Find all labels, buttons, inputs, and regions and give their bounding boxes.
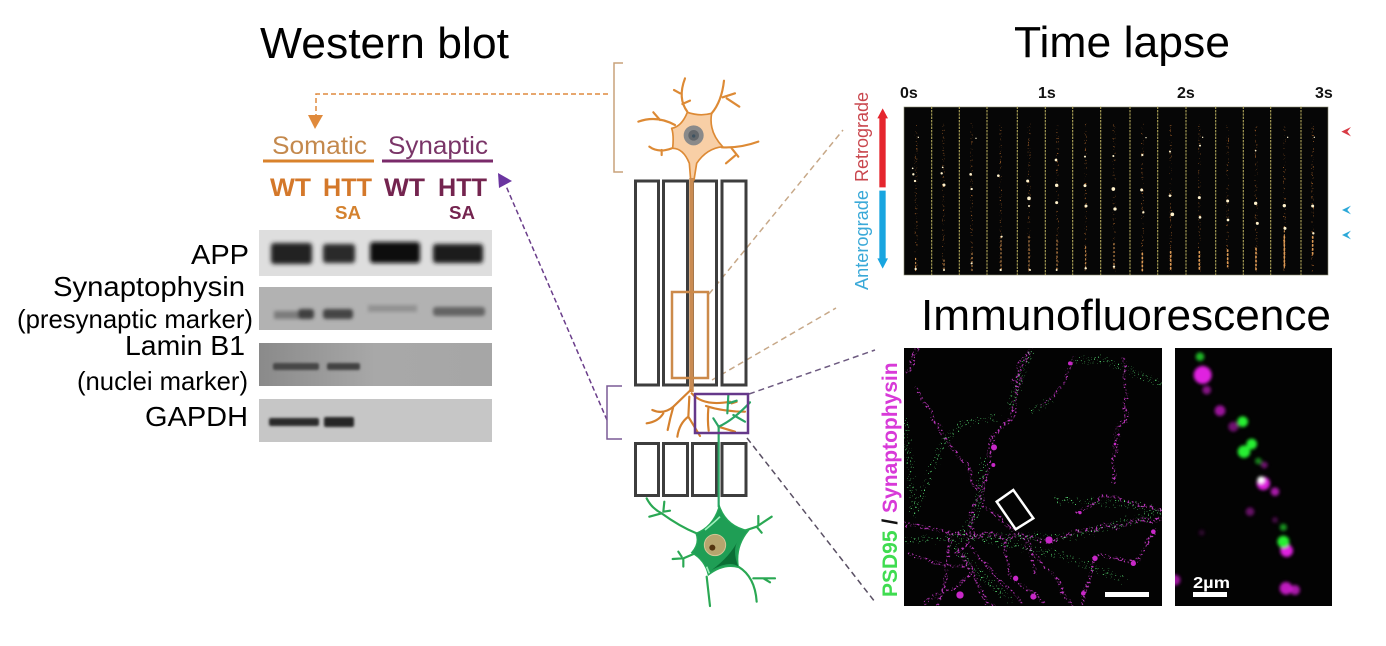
magenta clusters (956, 361, 1156, 600)
western blot panels (259, 230, 492, 442)
neuron: orange presynaptic (638, 78, 758, 180)
scale bar: detail (1193, 592, 1227, 597)
immunofluorescence panel: zoomed detail (1170, 348, 1332, 606)
label: 0s: 0s (900, 85, 918, 102)
label: 2µm: 2µm (1193, 575, 1230, 592)
bracket: somatic compartment (614, 63, 623, 172)
bracket: synaptic compartment (607, 386, 622, 439)
label: 1s: 1s (1038, 85, 1056, 102)
blot: Synaptophysin (259, 287, 492, 330)
title: Immunofluorescence: Immunofluorescence (921, 291, 1331, 340)
label: HTT somatic: HTT (323, 174, 372, 202)
marker: blue upper (1342, 206, 1351, 214)
soma: orange (672, 112, 723, 180)
frame dividers (932, 107, 1301, 275)
blot: Lamin B1 (259, 343, 492, 386)
label: 2s: 2s (1177, 85, 1195, 102)
dashed zoom lines (709, 130, 875, 602)
label: GAPDH: GAPDH (145, 401, 248, 432)
arrowhead: purple (498, 173, 512, 188)
title: Western blot: Western blot (260, 19, 509, 68)
marker: red (1341, 127, 1351, 136)
label: SA synaptic: SA (449, 203, 475, 223)
dashed connector: soma to Somatic heading (308, 94, 608, 129)
time axis labels (900, 85, 1333, 102)
highlighted region box (997, 490, 1033, 529)
label: Retrograde: Retrograde (852, 92, 872, 182)
magenta synaptophysin filaments (905, 350, 1160, 603)
marker: blue lower (1342, 231, 1351, 239)
scale bar: overview (1105, 592, 1149, 597)
axon terminal: orange (647, 390, 745, 437)
green PSD95 puncta (905, 353, 1160, 600)
neuron: green postsynaptic (647, 498, 775, 606)
magenta puncta detail (1170, 366, 1300, 595)
label: WT synaptic: WT (384, 174, 425, 202)
title: Time lapse: Time lapse (1014, 18, 1230, 67)
microfluidic channels: lower (636, 444, 746, 496)
label: SA somatic: SA (335, 203, 361, 223)
kymograph time lapse panel (904, 107, 1328, 275)
soma: green (692, 506, 748, 575)
arrowhead: orange (308, 115, 323, 129)
arrowhead markers beside kymograph (1341, 127, 1351, 239)
direction arrows (877, 108, 888, 269)
label: HTT synaptic: HTT (438, 174, 487, 202)
green puncta detail (1196, 352, 1289, 548)
label: APP: APP (191, 239, 249, 270)
bright distal streaks (916, 227, 1313, 271)
speckled axon traces (916, 123, 1313, 272)
label: WT somatic: WT (270, 174, 311, 202)
column headers: somatic and synaptic (263, 132, 493, 223)
nucleus: orange neuron (684, 125, 704, 145)
label: nuclei marker: (nuclei marker) (77, 366, 248, 396)
arrow: anterograde (877, 191, 888, 269)
heading: Somatic: Somatic (272, 132, 367, 160)
sampling box: purple (695, 394, 748, 433)
label: 3s: 3s (1315, 85, 1333, 102)
blot row labels (17, 239, 253, 432)
arrow: retrograde (877, 108, 888, 187)
moving puncta (912, 137, 1315, 271)
colocalised punctum (1257, 476, 1265, 484)
label: Anterograde: Anterograde (852, 190, 872, 290)
label: presynaptic marker: (presynaptic marker) (17, 304, 253, 334)
axon: green with dendrites (713, 395, 750, 507)
axon: orange (689, 178, 694, 392)
microfluidic channels: upper (636, 181, 746, 385)
immunofluorescence panel: overview (904, 348, 1162, 606)
label: PSD95 / Synaptophysin: PSD95 / Synaptophysin (879, 362, 902, 597)
nucleus: green neuron (704, 534, 726, 556)
blot: APP (259, 230, 492, 276)
label: Lamin B1: Lamin B1 (125, 330, 245, 361)
blot: GAPDH (259, 399, 492, 442)
heading: Synaptic: Synaptic (388, 132, 488, 160)
label: Synaptophysin: Synaptophysin (53, 271, 245, 302)
sampling box: orange (672, 292, 708, 378)
dashed connector: synaptic to Synaptic heading (498, 173, 607, 420)
